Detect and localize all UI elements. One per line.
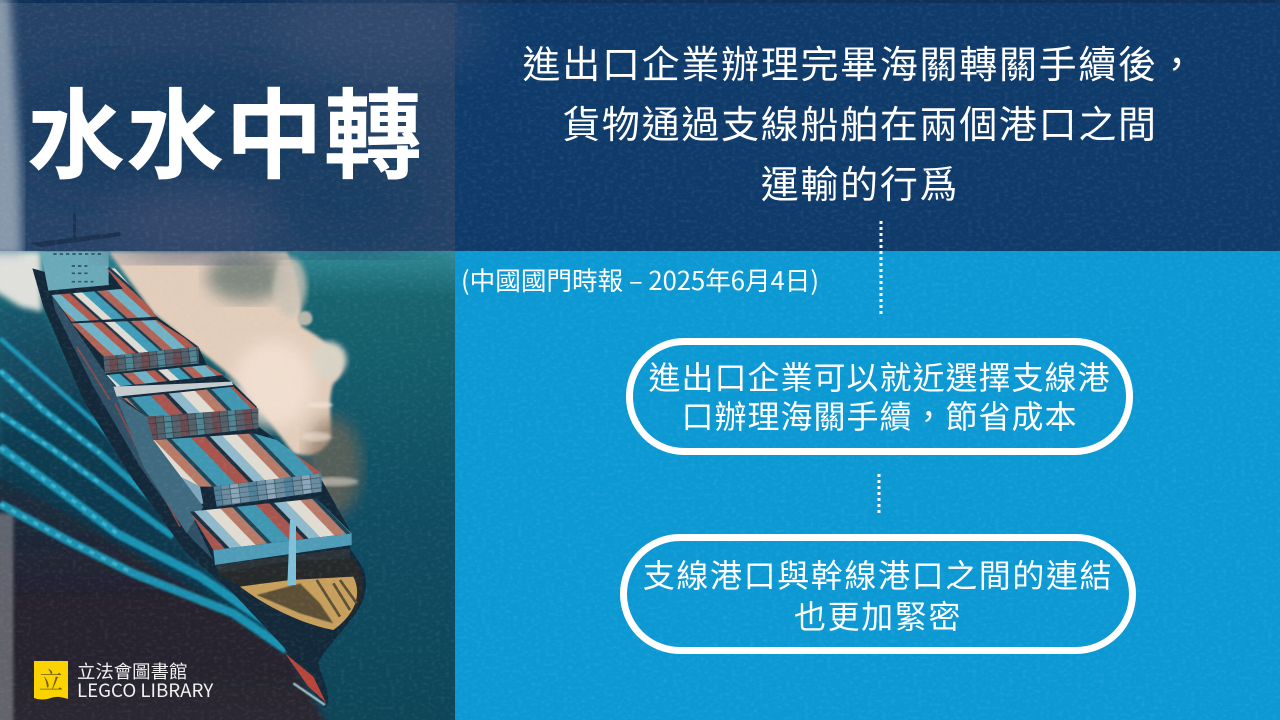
icon: yellow flag emblem — [34, 661, 68, 700]
logo wordmark — [77, 658, 214, 703]
hull red markings — [77, 347, 180, 527]
top left dark panel — [0, 0, 455, 251]
top right dark panel — [455, 0, 1280, 251]
container block E — [117, 397, 322, 533]
smoke plume — [109, 252, 362, 517]
dark hull shadow water — [0, 470, 330, 720]
bridge windows — [53, 254, 102, 282]
rear deck stripe — [107, 268, 153, 315]
icon: yellow flag emblem: 立 — [39, 661, 63, 696]
top left mottling — [0, 0, 490, 258]
callout text: closer ties — [643, 551, 1113, 638]
bow red accent — [285, 653, 326, 703]
grey left edge — [0, 513, 13, 720]
mast — [287, 520, 296, 585]
callout text: closer ties: 支線港口與幹線港口之間的連結 — [643, 551, 1113, 597]
callout text: lower cost — [648, 353, 1110, 438]
container block D — [123, 387, 258, 440]
logo wordmark: LEGCO LIBRARY — [77, 676, 213, 703]
definition text: 貨物通過支線船舶在兩個港口之間 — [562, 94, 1158, 149]
bow foam — [293, 683, 325, 705]
callout: closer ties — [620, 534, 1136, 654]
callout: lower cost — [626, 338, 1133, 455]
wake highlights — [0, 371, 133, 573]
right blue background — [455, 251, 1280, 720]
wake water — [0, 307, 283, 653]
blue column edge — [455, 251, 456, 720]
definition text: 進出口企業辦理完畢海關轉關手續後， — [523, 34, 1197, 89]
callout text: closer ties: 也更加緊密 — [794, 592, 962, 638]
bridge superstructure — [41, 252, 109, 291]
callout text: lower cost: 進出口企業可以就近選擇支線港 — [648, 353, 1110, 399]
ship mast silhouette — [30, 212, 121, 247]
container block B — [72, 320, 199, 373]
logo wordmark: 立法會圖書館 — [77, 658, 187, 684]
definition text — [523, 34, 1197, 209]
container block C — [107, 365, 233, 397]
container block F — [190, 498, 352, 575]
definition text: 運輸的行爲 — [761, 154, 959, 209]
container block A — [52, 288, 157, 322]
logo: LegCo Library — [34, 658, 214, 703]
top edge band — [0, 0, 1280, 3]
callout text: lower cost: 口辦理海關手續，節省成本 — [681, 392, 1078, 438]
bow deck — [217, 558, 363, 630]
hull — [32, 267, 366, 708]
sea background — [0, 251, 455, 720]
hull side plating — [52, 295, 213, 560]
title: 水水中轉 — [27, 57, 423, 199]
top dotted connector — [880, 221, 882, 314]
middle dotted connector — [878, 474, 880, 515]
wake streaks — [0, 338, 287, 650]
source citation: (中國國門時報 – 2025年6月4日) — [461, 261, 819, 298]
pale smoke by stern — [0, 252, 42, 312]
